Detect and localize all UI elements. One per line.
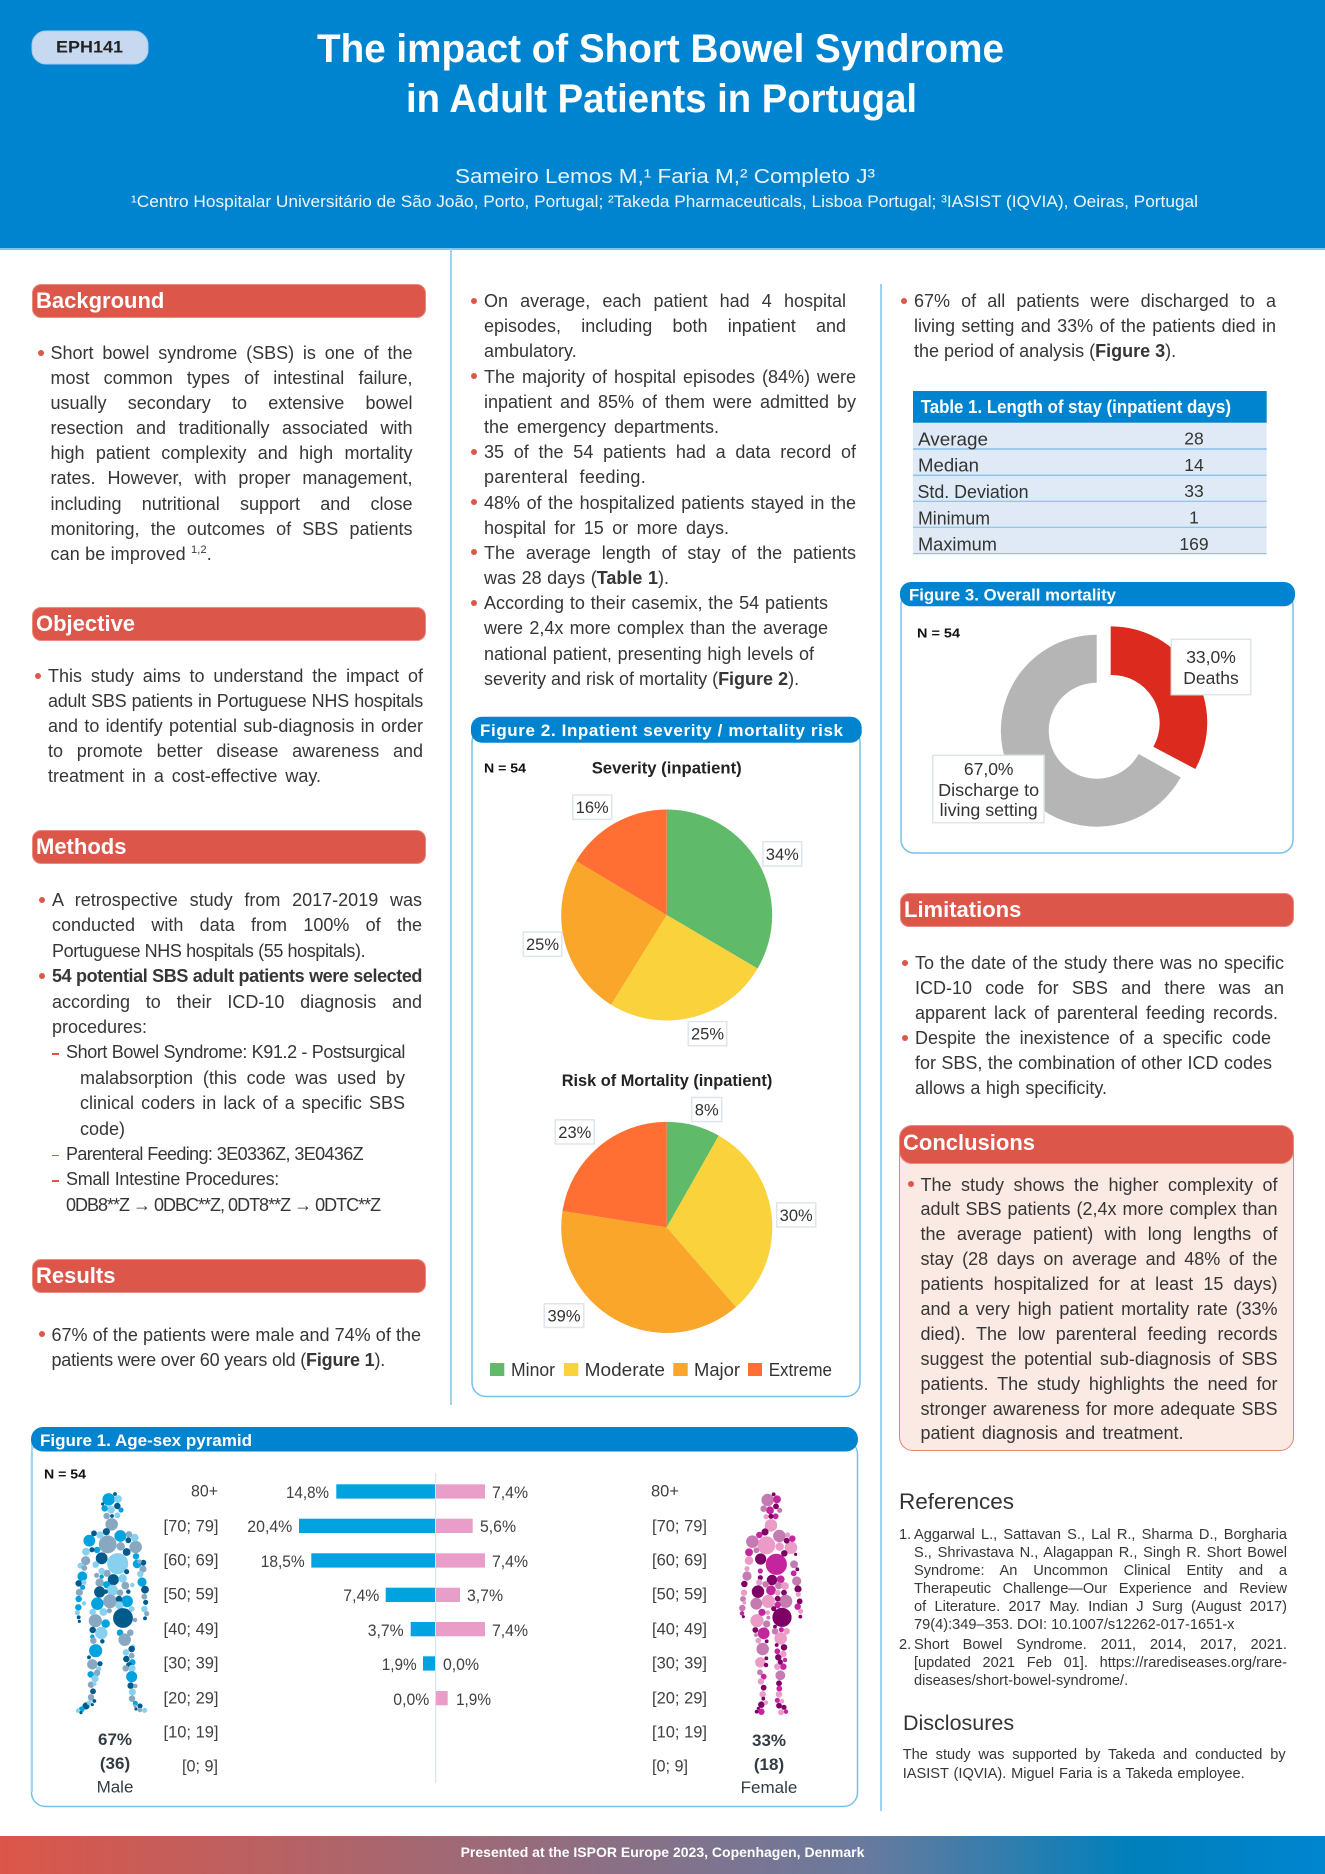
heading: background <box>32 284 426 318</box>
age labels right: [0; 9] <box>652 1756 688 1776</box>
text: methods: malabsorption (this code was used by <box>80 1068 405 1088</box>
age labels left: [20; 29] <box>164 1688 218 1708</box>
age labels right <box>651 1482 707 1776</box>
text: conclusions: the average patient) with long lengths of <box>920 1224 1278 1244</box>
text: disclosures: IASIST (IQVIA). Miguel Faria is a Takeda employee. <box>903 1766 1245 1782</box>
table: length of stay: Minimum <box>918 508 990 528</box>
text: methods: Small Intestine Procedures: <box>66 1169 279 1189</box>
table: length of stay: 1 <box>1189 508 1199 528</box>
text: references: 1. <box>899 1527 911 1543</box>
age labels left <box>164 1482 218 1776</box>
age labels left: [30; 39] <box>164 1654 218 1672</box>
poster code badge <box>32 31 148 64</box>
text: methods: Portuguese NHS hospitals (55 hospitals). <box>52 941 365 961</box>
bar chart: age-sex pyramid: 7,4% <box>492 1483 528 1502</box>
callout: deaths: 33,0% <box>1186 647 1236 667</box>
heading: conclusions: Conclusions <box>903 1130 1035 1154</box>
text: methods: 54 potential SBS adult patients were selected <box>52 966 422 986</box>
age labels right: [10; 19] <box>652 1722 707 1742</box>
table: length of stay: Median <box>918 456 979 476</box>
heading: limitations <box>900 893 1294 927</box>
affiliations: ¹Centro Hospitalar Universitário de São João, Porto, Portugal; ²Takeda Pharmaceuticals, Lisboa Portugal; ³IASIST (IQVIA), Oeiras, Portugal <box>131 192 1198 211</box>
pie chart: risk of mortality: 23% <box>558 1124 592 1142</box>
text: results findings column 2: parenteral feeding. <box>484 467 646 487</box>
title: The impact of Short Bowel Syndrome <box>317 27 1004 71</box>
bar chart: age-sex pyramid: 0,0% <box>393 1690 429 1709</box>
pie chart: severity: 16% <box>576 799 609 817</box>
heading: background: Background <box>36 288 164 313</box>
text: conclusions: patients hospitalized for at least 15 days) <box>920 1274 1278 1294</box>
table: length of stay: 14 <box>1184 455 1204 475</box>
figure 2 heading: Figure 2. Inpatient severity / mortality risk <box>480 721 844 740</box>
bar chart: age-sex pyramid: 7,4% <box>343 1586 379 1605</box>
text: discharge findings column 3: the period of analysis (Figure 3). <box>914 341 1176 361</box>
female share <box>741 1731 797 1797</box>
text: objective: This study aims to understand the impact of <box>48 666 423 686</box>
text: methods <box>39 890 422 1215</box>
text: results findings column 2: was 28 days (Table 1). <box>484 568 669 588</box>
age labels left: [40; 49] <box>164 1620 218 1638</box>
callout: discharge to living setting: living setting <box>940 800 1038 820</box>
heading: disclosures: Disclosures <box>903 1711 1014 1735</box>
text: references <box>899 1527 1288 1689</box>
table: length of stay: 33 <box>1184 481 1204 501</box>
age labels left: [70; 79] <box>164 1516 218 1536</box>
text: references: 2. <box>899 1637 911 1653</box>
bar chart: age-sex pyramid: 0,0% <box>443 1655 479 1674</box>
text: methods: 0DB8**Z → 0DBC**Z, 0DT8**Z → 0DTC**Z <box>66 1195 380 1215</box>
panel: conclusions <box>899 1125 1294 1451</box>
heading: results <box>32 1259 426 1293</box>
bar chart: age-sex pyramid: 18,5% <box>261 1552 305 1571</box>
sample size: N = 54 <box>44 1466 87 1482</box>
pie chart: risk of mortality: 30% <box>780 1207 813 1225</box>
figure 1 heading: Figure 1. Age-sex pyramid <box>40 1431 252 1450</box>
text: references: [updated 2021 Feb 01]. https://rarediseases.org/rare- <box>914 1655 1287 1671</box>
text: disclosures <box>903 1747 1286 1782</box>
age labels right: [70; 79] <box>652 1516 707 1536</box>
table: length of stay: 169 <box>1179 534 1209 554</box>
text: conclusions: The study shows the higher complexity of <box>920 1174 1278 1194</box>
text: conclusions: stronger awareness for more adequate SBS <box>920 1399 1278 1419</box>
callout: discharge to living setting: Discharge to <box>938 780 1039 800</box>
text: results findings column 2: 35 of the 54 patients had a data record of <box>484 442 856 462</box>
text: conclusions: adult SBS patients (2,4x more complex than <box>920 1199 1278 1219</box>
text: background: high patient complexity and high mortality <box>50 443 412 463</box>
age labels right: [20; 29] <box>652 1688 707 1708</box>
text: background: resection and traditionally associated with <box>50 418 412 438</box>
text: limitations <box>902 953 1284 1098</box>
bar chart: age-sex pyramid: 7,4% <box>492 1621 528 1640</box>
text: conclusions: suggest the potential sub-diagnosis of SBS <box>920 1349 1278 1369</box>
table: length of stay: 28 <box>1184 429 1204 449</box>
age labels left: [60; 69] <box>164 1550 218 1570</box>
text: background: usually secondary to extensive bowel <box>50 393 412 413</box>
bar chart: age-sex pyramid: 7,4% <box>492 1552 528 1571</box>
text: conclusions: patient diagnosis and treatment. <box>920 1423 1184 1443</box>
table: length of stay: Table 1. Length of stay (inpatient days) <box>921 397 1231 417</box>
text: results findings column 2: According to their casemix, the 54 patients <box>484 593 828 613</box>
heading: objective <box>32 607 426 641</box>
text: background: can be improved 1,2. <box>50 544 212 564</box>
text: limitations: for SBS, the combination of other ICD codes <box>915 1053 1272 1073</box>
age labels left: [10; 19] <box>164 1722 218 1742</box>
text: references: Aggarwal L., Sattavan S., Lal R., Sharma D., Borgharia <box>914 1527 1287 1543</box>
heading: methods: Methods <box>36 834 126 859</box>
male share: 67% <box>98 1730 132 1749</box>
text: results findings column 2: episodes, including both inpatient and <box>484 316 846 336</box>
figure 2 heading <box>471 717 862 743</box>
text: results <box>39 1325 421 1370</box>
text: results findings column 2: inpatient and 85% of them were admitted by <box>484 392 856 412</box>
text: background: Short bowel syndrome (SBS) is one of the <box>50 343 412 363</box>
male share: (36) <box>100 1754 130 1773</box>
bar chart: age-sex pyramid <box>247 1473 528 1783</box>
text: methods: procedures: <box>52 1017 147 1037</box>
age labels left: 80+ <box>191 1482 218 1500</box>
legend: Minor <box>511 1360 555 1380</box>
chart title: severity: Severity (inpatient) <box>592 758 742 778</box>
text: references: of Literature. 2017 May. Indian J Surg (August 2017) <box>914 1599 1287 1615</box>
text: background <box>38 343 412 564</box>
figure 3 heading <box>900 582 1295 606</box>
text: results findings column 2: national patient, presenting high levels of <box>484 644 814 664</box>
legend <box>490 1360 832 1380</box>
text: discharge findings column 3: 67% of all patients were discharged to a <box>914 291 1276 311</box>
pie chart: risk of mortality <box>544 1098 816 1333</box>
text: results findings column 2: the emergency departments. <box>484 417 719 437</box>
text: results findings column 2: 48% of the hospitalized patients stayed in the <box>484 492 856 512</box>
text: background: most common types of intestinal failure, <box>50 368 412 388</box>
pie chart: severity: 25% <box>526 936 559 954</box>
callout: deaths <box>1171 639 1251 695</box>
header band <box>0 0 1325 250</box>
text: objective: adult SBS patients in Portuguese NHS hospitals <box>48 691 423 711</box>
text: references: 79(4):349–353. DOI: 10.1007/s12262-017-1651-x <box>914 1617 1234 1633</box>
text: results findings column 2: severity and risk of mortality (Figure 2). <box>484 669 799 689</box>
age labels right: 80+ <box>651 1482 679 1500</box>
heading: references: References <box>899 1489 1014 1514</box>
pie chart: severity <box>523 795 802 1046</box>
text: background: rates. However, with proper management, <box>50 468 412 488</box>
text: methods: A retrospective study from 2017-2019 was <box>52 890 422 910</box>
bar chart: age-sex pyramid: 14,8% <box>286 1483 329 1502</box>
text: methods: clinical coders in lack of a specific SBS <box>80 1093 405 1113</box>
male share <box>97 1730 133 1796</box>
text: results findings column 2: ambulatory. <box>484 341 577 361</box>
bar chart: age-sex pyramid: 5,6% <box>480 1517 516 1536</box>
heading: methods <box>32 830 426 864</box>
text: results findings column 2: The average length of stay of the patients <box>484 543 856 563</box>
text: discharge findings column 3 <box>901 291 1276 361</box>
pie chart: risk of mortality: 8% <box>695 1102 719 1120</box>
age labels left: [0; 9] <box>182 1756 218 1776</box>
table: length of stay: Maximum <box>918 535 997 555</box>
text: limitations: apparent lack of parenteral feeding records. <box>915 1003 1278 1023</box>
text: objective: and to identify potential sub-diagnosis in order <box>48 716 423 736</box>
pie chart: severity: 25% <box>691 1026 724 1044</box>
icon: male body made of circles <box>75 1493 149 1714</box>
authors: Sameiro Lemos M,¹ Faria M,² Completo J³ <box>455 165 875 188</box>
age labels right: [40; 49] <box>652 1620 707 1638</box>
age labels right: [50; 59] <box>652 1584 707 1604</box>
text: references: Therapeutic Challenge—Our Experience and Review <box>914 1581 1287 1597</box>
footer band <box>0 1836 1325 1874</box>
text: methods: Short Bowel Syndrome: K91.2 - Postsurgical <box>66 1042 405 1062</box>
heading: limitations: Limitations <box>904 897 1021 922</box>
icon: female body made of circles <box>740 1493 803 1715</box>
panel: figure 2 severity and mortality risk <box>471 716 862 1398</box>
title: in Adult Patients in Portugal <box>406 77 917 121</box>
text: background: including nutritional support and close <box>50 494 412 514</box>
text: objective: treatment in a cost-effective way. <box>48 766 321 786</box>
text: results findings column 2: On average, each patient had 4 hospital <box>484 291 846 311</box>
bar chart: age-sex pyramid: 1,9% <box>382 1655 417 1674</box>
text: results findings column 2: hospital for 15 or more days. <box>484 518 729 538</box>
pie chart: risk of mortality: 39% <box>547 1308 581 1326</box>
text: results findings column 2: were 2,4x more complex than the average <box>484 618 828 638</box>
chart title: risk of mortality: Risk of Mortality (inpatient) <box>562 1071 772 1090</box>
legend: Extreme <box>769 1360 832 1380</box>
sample size: N = 54 <box>484 760 527 776</box>
panel: figure 3 overall mortality <box>900 582 1295 854</box>
callout: discharge to living setting <box>933 755 1044 823</box>
text: objective <box>35 666 424 786</box>
text: background: monitoring, the outcomes of SBS patients <box>50 519 412 539</box>
sample size: N = 54 <box>917 626 961 640</box>
text: conclusions: stay (28 days on average and 48% of the <box>920 1249 1278 1269</box>
male share: Male <box>97 1778 133 1796</box>
text: results findings column 2: The majority of hospital episodes (84%) were <box>484 367 856 387</box>
figure 1 heading <box>31 1427 858 1452</box>
text: objective: to promote better disease awareness and <box>48 741 423 761</box>
callout: discharge to living setting: 67,0% <box>964 759 1014 779</box>
bar chart: age-sex pyramid: 20,4% <box>247 1517 292 1536</box>
text: conclusions: patients. The study highlights the need for <box>920 1374 1278 1394</box>
text: conclusions: and a very high patient mortality rate (33% <box>920 1299 1278 1319</box>
pie chart: severity: 34% <box>766 846 799 864</box>
text: methods: conducted with data from 100% of the <box>52 915 422 935</box>
table: length of stay: Average <box>918 430 988 450</box>
panel: figure 1 age-sex pyramid <box>30 1427 858 1808</box>
bar chart: age-sex pyramid: 1,9% <box>456 1690 491 1709</box>
text: references: S., Shrivastava N., Alagappan R., Singh R. Short Bowel <box>914 1545 1287 1561</box>
text: conclusions <box>908 1174 1278 1443</box>
bar chart: age-sex pyramid: 3,7% <box>467 1586 503 1605</box>
age labels right: [30; 39] <box>652 1654 707 1672</box>
female share: Female <box>741 1778 797 1797</box>
legend: Major <box>694 1360 740 1380</box>
text: limitations: Despite the inexistence of a specific code <box>915 1028 1271 1048</box>
table: length of stay: Std. Deviation <box>918 482 1028 502</box>
text: limitations: allows a high specificity. <box>915 1078 1107 1098</box>
bar chart: age-sex pyramid: 3,7% <box>368 1621 404 1640</box>
text: results: 67% of the patients were male and 74% of the <box>52 1325 421 1345</box>
text: methods: code) <box>80 1119 125 1139</box>
female share: 33% <box>752 1731 786 1750</box>
text: conclusions: died). The low parenteral feeding records <box>920 1324 1278 1344</box>
callout: deaths: Deaths <box>1183 668 1239 688</box>
female share: (18) <box>754 1755 784 1774</box>
text: limitations: To the date of the study there was no specific <box>915 953 1284 973</box>
figure 3 heading: Figure 3. Overall mortality <box>909 586 1117 604</box>
title <box>317 27 1004 121</box>
text: references: diseases/short-bowel-syndrome/. <box>914 1673 1128 1689</box>
text: discharge findings column 3: living setting and 33% of the patients died in <box>914 316 1276 336</box>
table: length of stay <box>913 391 1267 555</box>
heading: results: Results <box>36 1263 115 1288</box>
legend: Moderate <box>585 1360 665 1380</box>
text: methods: Parenteral Feeding: 3E0336Z, 3E0436Z <box>66 1144 363 1164</box>
text: results findings column 2 <box>471 291 856 689</box>
text: methods: according to their ICD-10 diagnosis and <box>52 992 422 1012</box>
text: references: Short Bowel Syndrome. 2011, 2014, 2017, 2021. <box>914 1637 1287 1653</box>
heading: objective: Objective <box>36 611 135 636</box>
footer band: Presented at the ISPOR Europe 2023, Copenhagen, Denmark <box>461 1844 864 1860</box>
poster code badge: EPH141 <box>56 38 123 56</box>
text: limitations: ICD-10 code for SBS and there was an <box>915 978 1284 998</box>
text: disclosures: The study was supported by Takeda and conducted by <box>903 1747 1286 1763</box>
text: results: patients were over 60 years old (Figure 1). <box>52 1350 385 1370</box>
donut chart: overall mortality <box>1001 626 1207 827</box>
age labels left: [50; 59] <box>164 1584 218 1604</box>
age labels right: [60; 69] <box>652 1550 707 1570</box>
text: references: Syndrome: An Uncommon Clinical Entity and a <box>914 1563 1287 1579</box>
heading: conclusions <box>898 1124 1294 1164</box>
